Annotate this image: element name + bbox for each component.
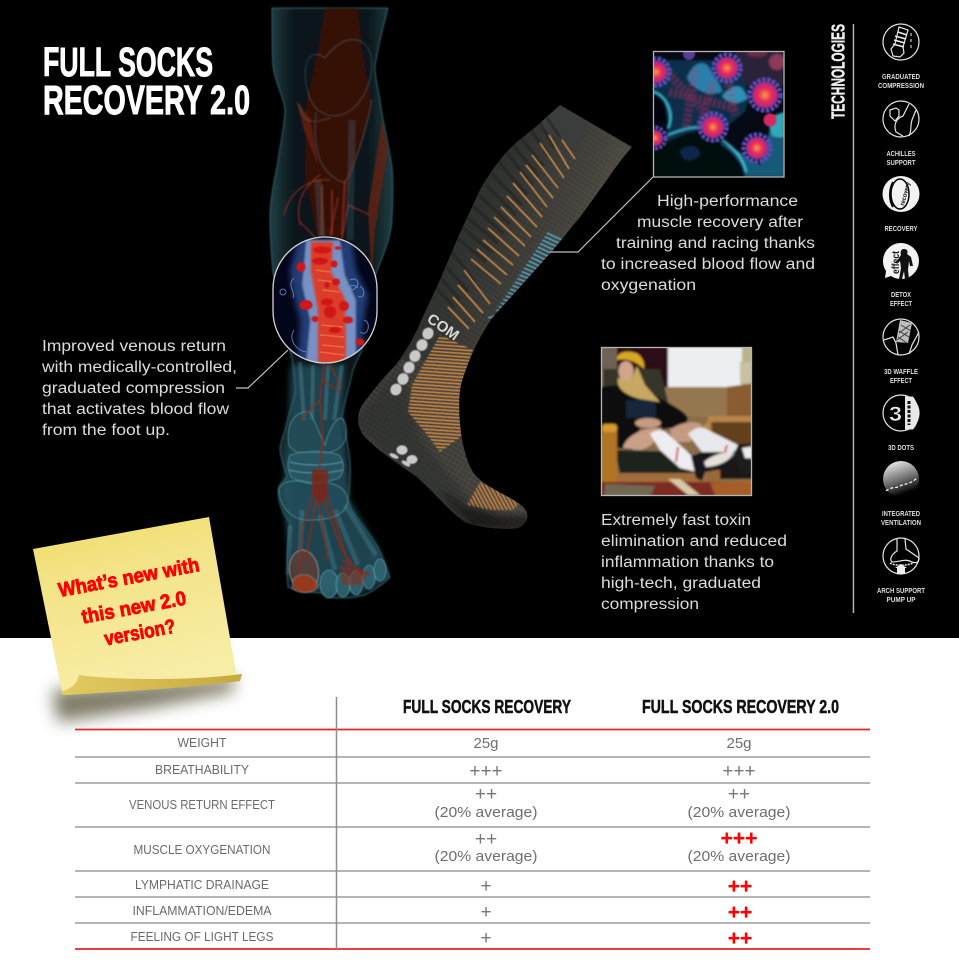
column: full socks recovery values: ++ (475, 784, 497, 805)
column: full socks recovery 2.0 values: +++ (721, 827, 757, 850)
technology: achilles support (883, 101, 919, 167)
compression sock (350, 100, 642, 537)
sock: left shading (400, 122, 617, 360)
sock: grip dots (388, 326, 436, 468)
column: full socks recovery 2.0 values: +++ (722, 761, 756, 782)
table header: FULL SOCKS RECOVERY (403, 697, 571, 717)
leg: foot glow (282, 365, 388, 592)
column: full socks recovery 2.0 values: ++ (728, 927, 752, 950)
sock: toe stripes (467, 482, 520, 510)
text: toxin elimination: compression (601, 596, 699, 613)
technology: arch support pump up (877, 538, 925, 604)
column: full socks recovery values: ++ (475, 829, 497, 850)
note text (57, 554, 201, 650)
table header: FULL SOCKS RECOVERY 2.0 (642, 697, 839, 717)
black hero background (0, 0, 959, 638)
sock: brand lettering: COM (424, 310, 462, 344)
column: full socks recovery 2.0 values: 25g (726, 735, 752, 752)
row labels: FEELING OF LIGHT LEGS (130, 930, 274, 944)
column: full socks recovery 2.0 values: (20% average) (688, 804, 791, 821)
text: venous return: from the foot up. (42, 422, 170, 439)
column: full socks recovery values (434, 735, 538, 949)
text: venous return: with medically-controlled, (41, 359, 237, 376)
text: muscle recovery (601, 193, 815, 294)
sock: top cuff (542, 106, 589, 149)
table header (403, 697, 839, 717)
technology: graduated compression (878, 24, 924, 90)
white table background (0, 638, 959, 979)
column: full socks recovery values: + (480, 928, 492, 949)
text: muscle recovery: muscle recovery after (637, 214, 803, 231)
note text: this new 2.0 (80, 588, 188, 629)
technology: integrated ventilation: VENTILATION (881, 518, 921, 527)
callout line: venous return (236, 350, 288, 388)
sock: blue ventilation stripes (488, 233, 562, 318)
leg: translucent skin (270, 8, 393, 598)
text: muscle recovery: oxygenation (601, 277, 696, 294)
technology: detox effect: effect (891, 250, 902, 274)
table grid (75, 697, 870, 949)
image: woman resting in compression socks (600, 346, 752, 496)
row labels: MUSCLE OXYGENATION (134, 843, 270, 857)
technology: arch support pump up: PUMP UP (886, 595, 916, 604)
technology: 3D waffle effect: 3D WAFFLE (884, 367, 918, 376)
technology: integrated ventilation: INTEGRATED (882, 509, 921, 518)
title (43, 39, 250, 123)
technology: recovery: recovery (899, 181, 912, 207)
column: full socks recovery 2.0 values: ++ (728, 875, 752, 898)
technology: integrated ventilation (881, 461, 921, 527)
leg anatomy illustration (270, 8, 393, 598)
row labels: INFLAMMATION/EDEMA (132, 904, 272, 918)
title: FULL SOCKS (43, 39, 213, 85)
leg: ankle and foot bones (279, 362, 386, 598)
note paper (33, 517, 237, 692)
leg: knee muscles and veins (284, 8, 388, 280)
sock: knit grid (358, 124, 630, 528)
technology: 3D waffle effect (883, 319, 919, 385)
technology: graduated compression: GRADUATED (882, 72, 921, 81)
note shadow (52, 678, 236, 722)
technology: 3D waffle effect: EFFECT (890, 376, 912, 385)
text: toxin elimination: elimination and reduced (601, 533, 787, 550)
note text: What’s new with (57, 554, 201, 602)
column: full socks recovery values: (20% average) (434, 848, 538, 865)
text: muscle recovery: training and racing thanks (616, 235, 815, 252)
capsule inset: blood flow (273, 237, 377, 363)
technology: detox effect: EFFECT (890, 299, 912, 308)
column: full socks recovery values: + (480, 876, 492, 897)
note curled edge (61, 674, 242, 695)
technology: 3D dots (883, 395, 919, 452)
sticky note (33, 517, 242, 722)
sock: heel and foot shading (358, 374, 506, 528)
text: muscle recovery: High-performance (657, 193, 798, 210)
technology: 3D dots: 3 (889, 403, 902, 426)
text: toxin elimination: inflammation thanks to (601, 554, 774, 571)
column: full socks recovery 2.0 values: ++ (728, 784, 750, 805)
row labels (129, 736, 275, 944)
text: venous return (41, 338, 237, 439)
image: cells (642, 48, 785, 177)
column: full socks recovery values: + (480, 902, 492, 923)
technology: 3D dots: 3D DOTS (888, 443, 914, 452)
leg: lower veins (299, 362, 370, 585)
row labels: BREATHABILITY (155, 763, 250, 777)
sock: sole shading (444, 494, 527, 528)
column: full socks recovery values: 25g (473, 735, 499, 752)
title: RECOVERY 2.0 (43, 77, 250, 123)
comparison table (75, 697, 870, 950)
text: toxin elimination: Extremely fast toxin (601, 512, 751, 529)
text: muscle recovery: to increased blood flow and (601, 256, 815, 273)
callout line: muscle recovery (550, 177, 653, 252)
text: venous return: that activates blood flow (42, 401, 230, 418)
technology: achilles support: SUPPORT (886, 158, 916, 167)
row labels: WEIGHT (178, 736, 227, 750)
technology: recovery: RECOVERY (884, 224, 918, 233)
text: toxin elimination (601, 512, 787, 613)
row labels: LYMPHATIC DRAINAGE (135, 878, 269, 892)
sock: dark ribs (433, 113, 560, 307)
technology: achilles support: ACHILLES (886, 149, 916, 158)
technologies divider (853, 24, 854, 613)
sock: ankle stripes (408, 335, 473, 452)
sock: orange ribs (448, 135, 575, 329)
technology: arch support pump up: ARCH SUPPORT (877, 586, 925, 595)
text: venous return: Improved venous return (42, 338, 226, 355)
technology: detox effect: DETOX (891, 290, 911, 299)
row labels: VENOUS RETURN EFFECT (129, 798, 275, 812)
column: full socks recovery 2.0 values (688, 735, 791, 950)
technology: detox effect (883, 243, 919, 308)
technology: recovery (882, 176, 920, 233)
column: full socks recovery 2.0 values: (20% average) (688, 848, 791, 865)
column: full socks recovery values: +++ (469, 761, 503, 782)
note text: version? (103, 616, 177, 650)
text: venous return: graduated compression (42, 380, 225, 397)
column: full socks recovery values: (20% average) (434, 804, 538, 821)
technology: graduated compression: COMPRESSION (878, 81, 924, 90)
text: toxin elimination: high-tech, graduated (601, 575, 761, 592)
column: full socks recovery 2.0 values: ++ (728, 901, 752, 924)
